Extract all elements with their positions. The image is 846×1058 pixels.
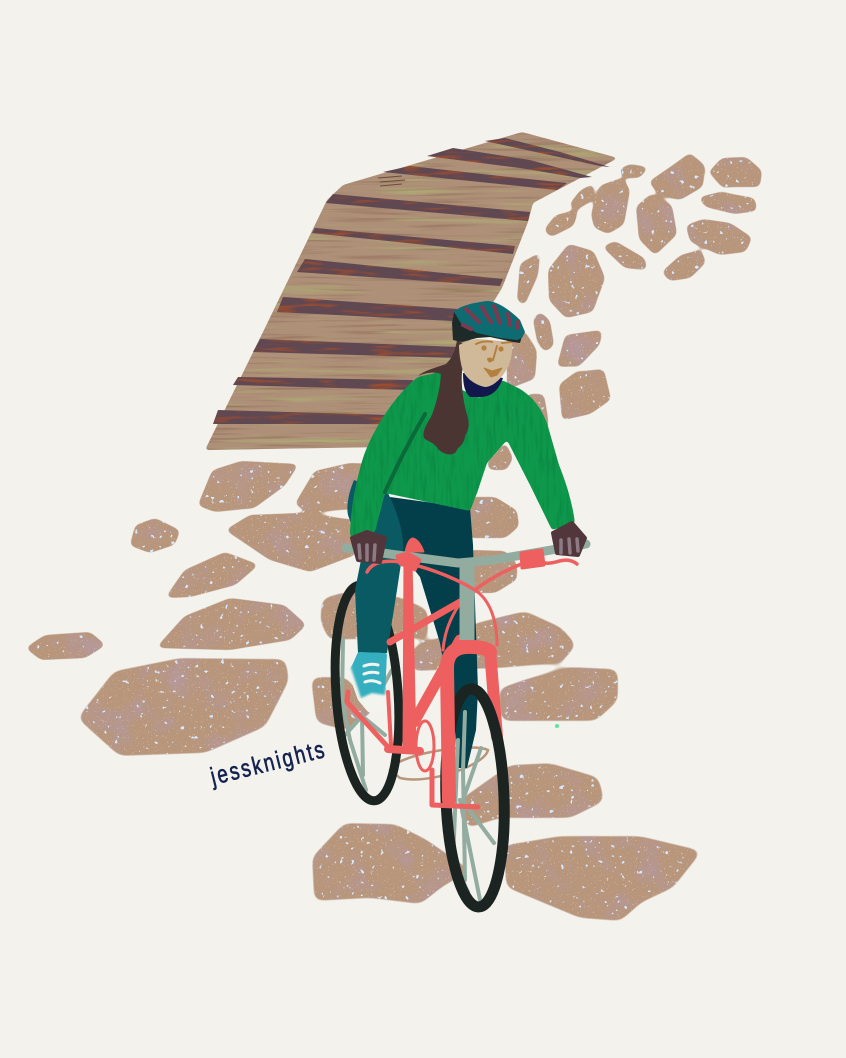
green speck (555, 724, 559, 728)
boardwalk (205, 132, 618, 450)
signature: jessknights (207, 735, 327, 791)
neck scarf (463, 373, 503, 397)
face (459, 339, 512, 387)
near leg and hip (347, 480, 403, 653)
faint stone outline under bike (390, 748, 488, 779)
helmet (452, 301, 525, 343)
hair (418, 340, 469, 454)
stepping stones: small upper cluster (27, 154, 761, 659)
cyclist (347, 301, 575, 768)
gloves (352, 523, 585, 562)
front bike wheel (442, 688, 508, 908)
shoe (348, 652, 388, 715)
rear bike wheel (329, 583, 405, 803)
sweater arm crease (385, 414, 425, 492)
shoe laces (364, 664, 380, 683)
stepping stones: large rounded lower group (80, 594, 699, 919)
bike frame (347, 538, 497, 807)
wood knot marks (378, 176, 405, 186)
handlebar (346, 544, 586, 640)
far leg (390, 497, 478, 768)
sweater (350, 372, 575, 537)
fork right leg (490, 650, 497, 737)
